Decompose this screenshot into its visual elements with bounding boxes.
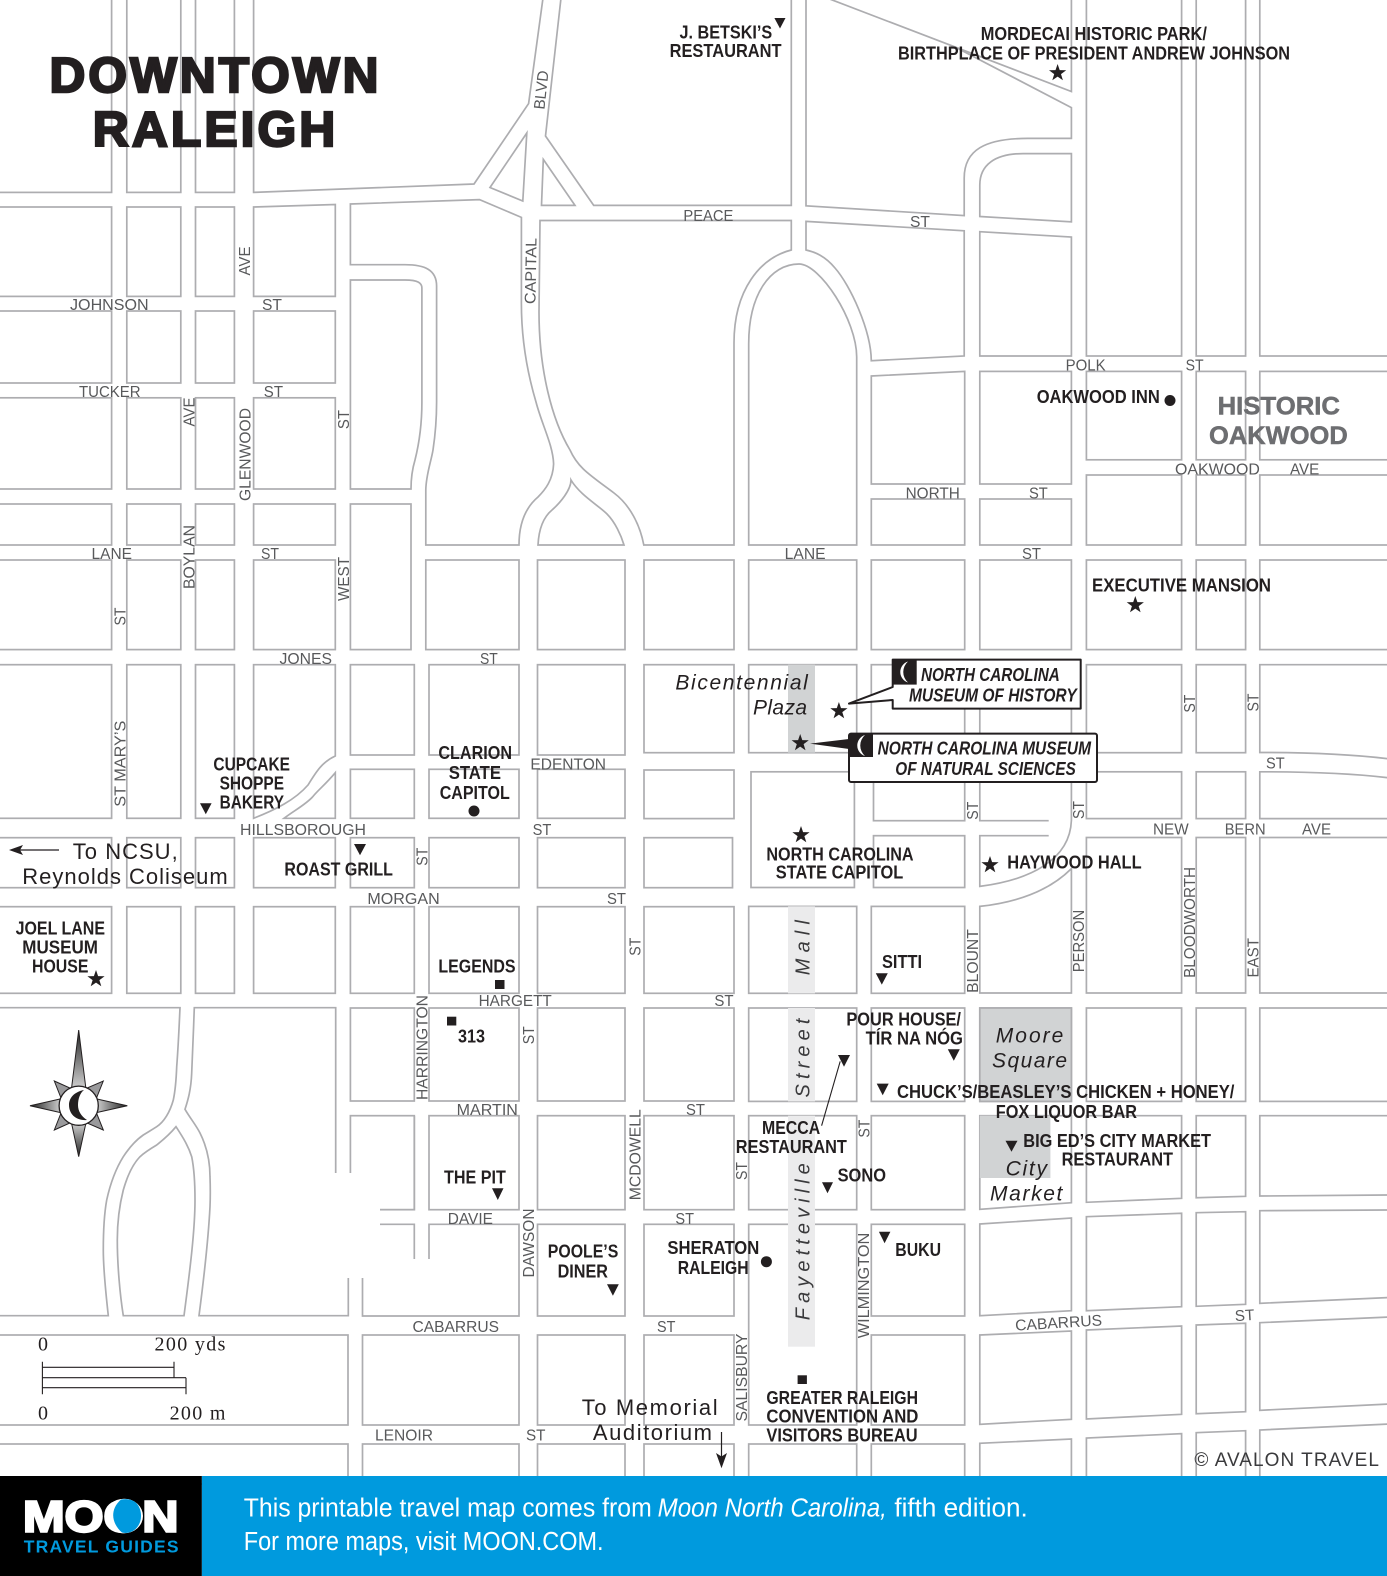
place labels: SHOPPE <box>220 772 284 793</box>
arrow: to Memorial Auditorium <box>582 1395 727 1468</box>
street labels: LENOIR <box>375 1428 433 1445</box>
mall street name <box>792 920 814 1320</box>
callout: North Carolina Museum of History: MUSEUM OF HISTORY <box>909 684 1078 705</box>
street labels: DAWSON <box>521 1208 538 1278</box>
compass rose <box>30 1030 127 1157</box>
place labels: MECCA <box>762 1117 820 1138</box>
arrow: to Memorial Auditorium: Auditorium <box>593 1420 712 1445</box>
place labels: MORDECAI HISTORIC PARK/ <box>981 23 1207 44</box>
area names: Square <box>992 1050 1067 1072</box>
banner: logo: TRAVEL GUIDES <box>24 1536 179 1556</box>
callout: North Carolina Museum of Natural Sciences: NORTH CAROLINA MUSEUM <box>878 737 1091 758</box>
callout: North Carolina Museum of History: NORTH CAROLINA <box>921 664 1060 685</box>
street labels: ST <box>480 651 498 668</box>
icons: squares <box>447 980 807 1384</box>
street labels: ST <box>261 546 279 563</box>
street labels: ST <box>112 607 130 626</box>
street labels: ST <box>1266 756 1285 773</box>
scale bar: 0 <box>38 1333 48 1355</box>
mall street name: Street <box>792 1017 814 1098</box>
title <box>50 49 382 157</box>
banner: logo: MOON <box>23 1492 178 1542</box>
street labels: AVE <box>1290 462 1319 479</box>
place labels: MUSEUM <box>22 936 98 957</box>
street labels: WILMINGTON <box>856 1233 873 1338</box>
place labels: SONO <box>838 1164 886 1185</box>
area names: Moore <box>996 1024 1063 1048</box>
banner: blue <box>202 1476 1387 1576</box>
street labels: CABARRUS <box>412 1319 499 1336</box>
place labels: POOLE’S <box>548 1240 618 1261</box>
place labels: POUR HOUSE/ <box>846 1009 961 1030</box>
arrow: to NCSU: Reynolds Coliseum <box>22 864 228 889</box>
street labels: MARTIN <box>457 1102 518 1119</box>
place labels: TÍR NA NÓG <box>866 1027 963 1048</box>
arrow: to Memorial Auditorium: To Memorial <box>582 1395 718 1420</box>
place labels: RESTAURANT <box>1062 1149 1174 1170</box>
street labels: ST <box>657 1319 676 1336</box>
area names: City <box>1006 1158 1048 1181</box>
place labels: GREATER RALEIGH <box>766 1387 918 1408</box>
street labels: PEACE <box>683 208 733 225</box>
street labels: MORGAN <box>367 891 440 908</box>
street labels: ST <box>1182 694 1199 713</box>
street labels: BLOUNT <box>965 929 982 993</box>
street labels: DAVIE <box>448 1211 493 1228</box>
place labels: BUKU <box>895 1239 941 1260</box>
leader line: Mecca Restaurant <box>822 1061 840 1126</box>
street labels: ST <box>675 1211 694 1228</box>
blocks at Davie Street <box>362 1116 519 1316</box>
banner: text: For more maps, visit MOON.COM. <box>244 1528 604 1556</box>
place labels: EXECUTIVE MANSION <box>1092 574 1271 596</box>
place labels: NORTH CAROLINA <box>766 843 914 864</box>
scale bar: 0 <box>38 1402 48 1424</box>
icons: restaurant triangles <box>200 18 1018 1296</box>
place labels: STATE <box>449 762 501 783</box>
street labels: POLK <box>1066 358 1106 374</box>
street labels: OAKWOOD <box>1175 462 1260 479</box>
banner: logo <box>0 1476 202 1576</box>
street labels: ST <box>1234 1307 1255 1325</box>
street labels: ST <box>1186 358 1204 374</box>
scale bar: 200 m <box>170 1402 226 1424</box>
street labels: PERSON <box>1071 910 1088 972</box>
street labels: CAPITAL <box>522 237 541 304</box>
place labels: SITTI <box>882 951 922 972</box>
area names: OAKWOOD <box>1209 422 1348 450</box>
street labels: ST <box>414 847 431 866</box>
street labels: ST <box>965 801 982 820</box>
park: Bicentennial Plaza <box>788 665 815 753</box>
street labels: WEST <box>336 556 353 601</box>
place labels: HAYWOOD HALL <box>1007 852 1142 873</box>
street labels: NEW <box>1153 822 1189 839</box>
street labels: NORTH <box>906 486 960 503</box>
street labels: EAST <box>1246 938 1263 978</box>
street labels: ST MARY’S <box>112 721 130 807</box>
street labels: BLVD <box>532 70 552 110</box>
scale bar: 200 yds <box>154 1333 226 1355</box>
place labels: STATE CAPITOL <box>776 862 903 883</box>
callout: North Carolina Museum of History <box>849 660 1081 709</box>
place labels: JOEL LANE <box>16 917 105 938</box>
place labels: J. BETSKI’S <box>680 22 772 42</box>
street labels: HILLSBOROUGH <box>240 822 366 839</box>
street labels: ST <box>607 891 627 908</box>
arrow: to NCSU <box>9 839 228 889</box>
icons: sight stars <box>87 64 1144 986</box>
place labels: FOX LIQUOR BAR <box>996 1101 1137 1122</box>
street labels: AVE <box>181 398 198 426</box>
banner: text: fifth edition. <box>894 1495 1028 1523</box>
place labels: SHERATON <box>667 1237 759 1258</box>
street labels: ST <box>521 1026 538 1044</box>
place labels: CLARION <box>438 742 512 763</box>
street labels: SALISBURY <box>734 1334 751 1422</box>
street labels: ST <box>1246 693 1263 712</box>
area names: Bicentennial <box>675 671 809 694</box>
place labels: BIG ED’S CITY MARKET <box>1023 1130 1212 1151</box>
place labels: CAPITOL <box>440 782 510 803</box>
street labels: JOHNSON <box>70 297 149 314</box>
place labels: HOUSE <box>32 955 88 976</box>
area names <box>675 392 1348 1206</box>
street labels: GLENWOOD <box>238 408 254 501</box>
street labels: HARGETT <box>479 993 552 1010</box>
place labels: VISITORS BUREAU <box>766 1425 918 1446</box>
street labels: ST <box>1029 486 1048 503</box>
area names: Market <box>990 1183 1064 1206</box>
street labels: ST <box>264 384 284 401</box>
street labels: ST <box>336 410 353 429</box>
street labels: ST <box>857 1119 874 1138</box>
place labels: CHUCK’S/BEASLEY’S CHICKEN + HONEY/ <box>897 1081 1234 1102</box>
mall street name: Mall <box>792 920 814 975</box>
street labels: BOYLAN <box>181 525 198 589</box>
street labels: ST <box>734 1162 751 1180</box>
street labels: TUCKER <box>79 384 141 401</box>
place labels: CUPCAKE <box>213 754 290 775</box>
place labels: RESTAURANT <box>670 40 782 61</box>
street stubs <box>980 771 1071 886</box>
mall band: Fayetteville Street <box>788 906 815 1347</box>
street labels: CABARRUS <box>1015 1312 1103 1335</box>
street labels: ST <box>526 1428 546 1445</box>
blank area <box>330 1173 432 1278</box>
street labels <box>70 70 1331 1445</box>
street labels: ST <box>686 1102 706 1119</box>
banner: text <box>244 1495 1028 1556</box>
place labels: CONVENTION AND <box>766 1406 918 1427</box>
place labels: BIRTHPLACE OF PRESIDENT ANDREW JOHNSON <box>898 42 1290 63</box>
title: DOWNTOWN <box>50 49 382 103</box>
street labels: ST <box>1071 801 1088 819</box>
street labels: JONES <box>280 651 332 668</box>
icons: hotel dots <box>468 395 1176 1267</box>
street labels: ST <box>627 937 644 956</box>
street labels: ST <box>714 993 734 1010</box>
street labels: ST <box>262 297 283 314</box>
place labels: THE PIT <box>444 1166 506 1187</box>
street labels: ST <box>533 822 552 839</box>
area names: Plaza <box>753 696 807 719</box>
area names: HISTORIC <box>1218 392 1340 420</box>
copyright: © AVALON TRAVEL <box>1194 1450 1379 1471</box>
place labels: ROAST GRILL <box>284 859 393 880</box>
park: City Market <box>980 1116 1050 1178</box>
place labels: LEGENDS <box>438 955 516 976</box>
street labels: ST <box>910 214 931 231</box>
street labels: BLOODWORTH <box>1182 867 1199 978</box>
banner: text: This printable travel map comes from <box>244 1495 652 1523</box>
banner: text: Moon North Carolina, <box>658 1495 887 1523</box>
mall street name: Fayetteville <box>792 1163 814 1320</box>
street labels: ST <box>1022 546 1042 563</box>
callout: North Carolina Museum of Natural Sciences: OF NATURAL SCIENCES <box>895 758 1076 779</box>
street labels: LANE <box>785 546 826 563</box>
street labels: AVE <box>1302 822 1331 839</box>
place labels: 313 <box>458 1025 485 1046</box>
arrow: to NCSU: To NCSU, <box>73 839 178 864</box>
street labels: EDENTON <box>530 756 606 773</box>
place labels: OAKWOOD INN <box>1037 386 1160 407</box>
place labels: BAKERY <box>220 791 285 812</box>
street labels: LANE <box>92 546 132 563</box>
title: RALEIGH <box>93 103 338 157</box>
callout: North Carolina Museum of Natural Sciences <box>810 734 1097 782</box>
street labels: MCDOWELL <box>627 1109 644 1200</box>
street labels: BERN <box>1225 822 1266 839</box>
place labels: RALEIGH <box>678 1257 749 1278</box>
place labels: RESTAURANT <box>736 1136 848 1157</box>
scale bar <box>38 1333 226 1424</box>
street labels: AVE <box>237 246 254 276</box>
park: Moore Square <box>980 1008 1071 1101</box>
place labels: DINER <box>558 1260 608 1281</box>
street labels: HARRINGTON <box>414 995 431 1100</box>
